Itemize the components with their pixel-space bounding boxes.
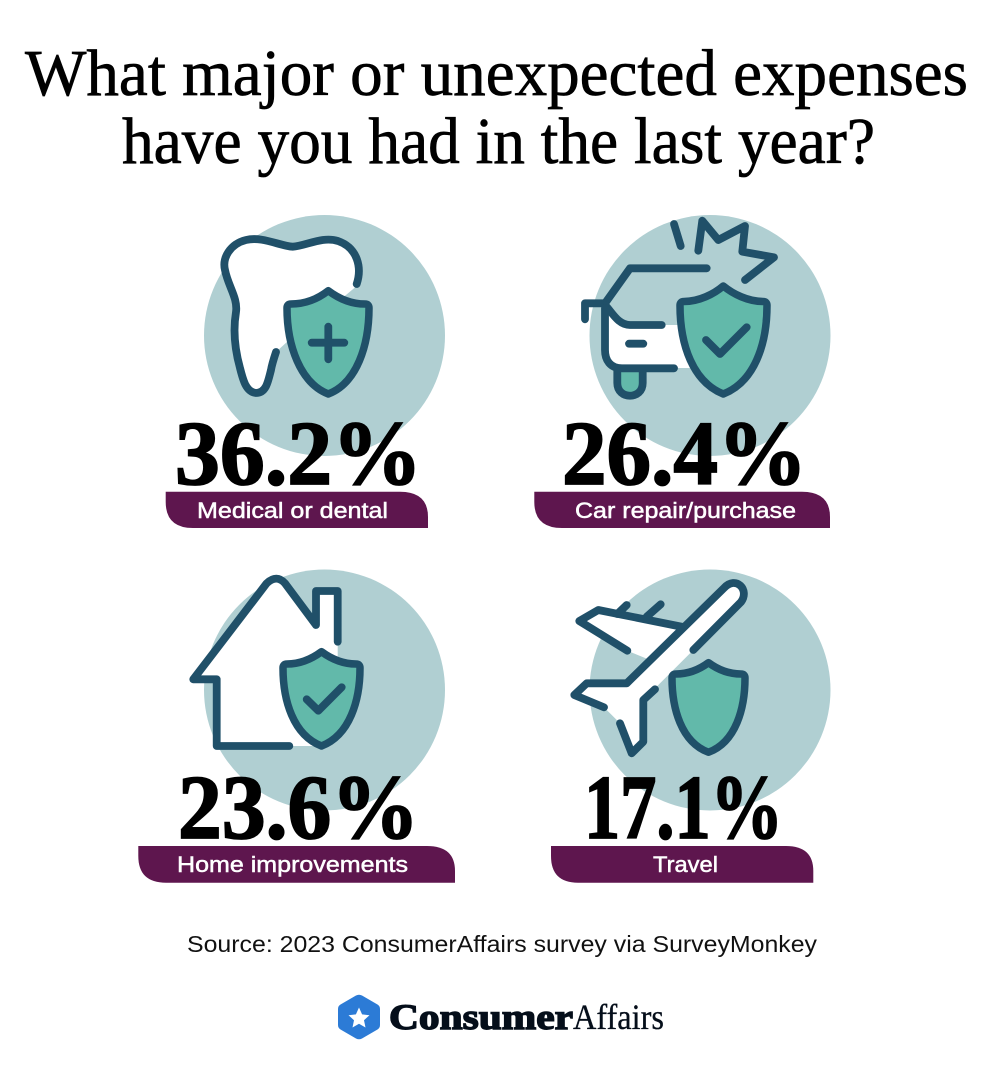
label: car repair/purchase (534, 492, 830, 528)
icon: house with check shield (193, 579, 360, 746)
panel: medical or dental (166, 215, 445, 528)
wordmark: Affairs (573, 997, 664, 1037)
panel: travel (551, 570, 830, 883)
label: home improvements (138, 846, 455, 883)
value: 36.2%: 36.2% (175, 403, 422, 504)
title: have you had in the last year? (122, 105, 875, 178)
label: travel: Travel (653, 852, 718, 877)
background circle: car (590, 215, 830, 456)
source note: Source: 2023 ConsumerAffairs survey via SurveyMonkey (187, 931, 817, 957)
title: What major or unexpected expenses (25, 37, 968, 110)
icon: blue hexagon with star (338, 995, 380, 1039)
label: car repair/purchase: Car repair/purchase (575, 498, 796, 523)
label: medical or dental (166, 492, 428, 528)
panel: car repair or purchase (534, 215, 830, 528)
icon: tooth with medical shield (224, 239, 369, 394)
logo: ConsumerAffairs (338, 995, 664, 1039)
title (25, 37, 968, 178)
label: home improvements: Home improvements (177, 852, 408, 877)
panel: home improvements (138, 570, 455, 883)
label: travel (551, 846, 813, 883)
background circle: home (204, 570, 445, 810)
background circle: travel (590, 570, 830, 810)
background circle: medical (204, 215, 445, 456)
icon: airplane with shield (574, 583, 745, 753)
label: medical or dental: Medical or dental (197, 498, 388, 523)
icon: car with check shield (585, 221, 774, 396)
value: 23.6%: 23.6% (178, 757, 419, 858)
value: 17.1%: 17.1% (584, 757, 783, 858)
wordmark: Consumer (389, 997, 573, 1037)
value: 26.4%: 26.4% (562, 403, 807, 504)
